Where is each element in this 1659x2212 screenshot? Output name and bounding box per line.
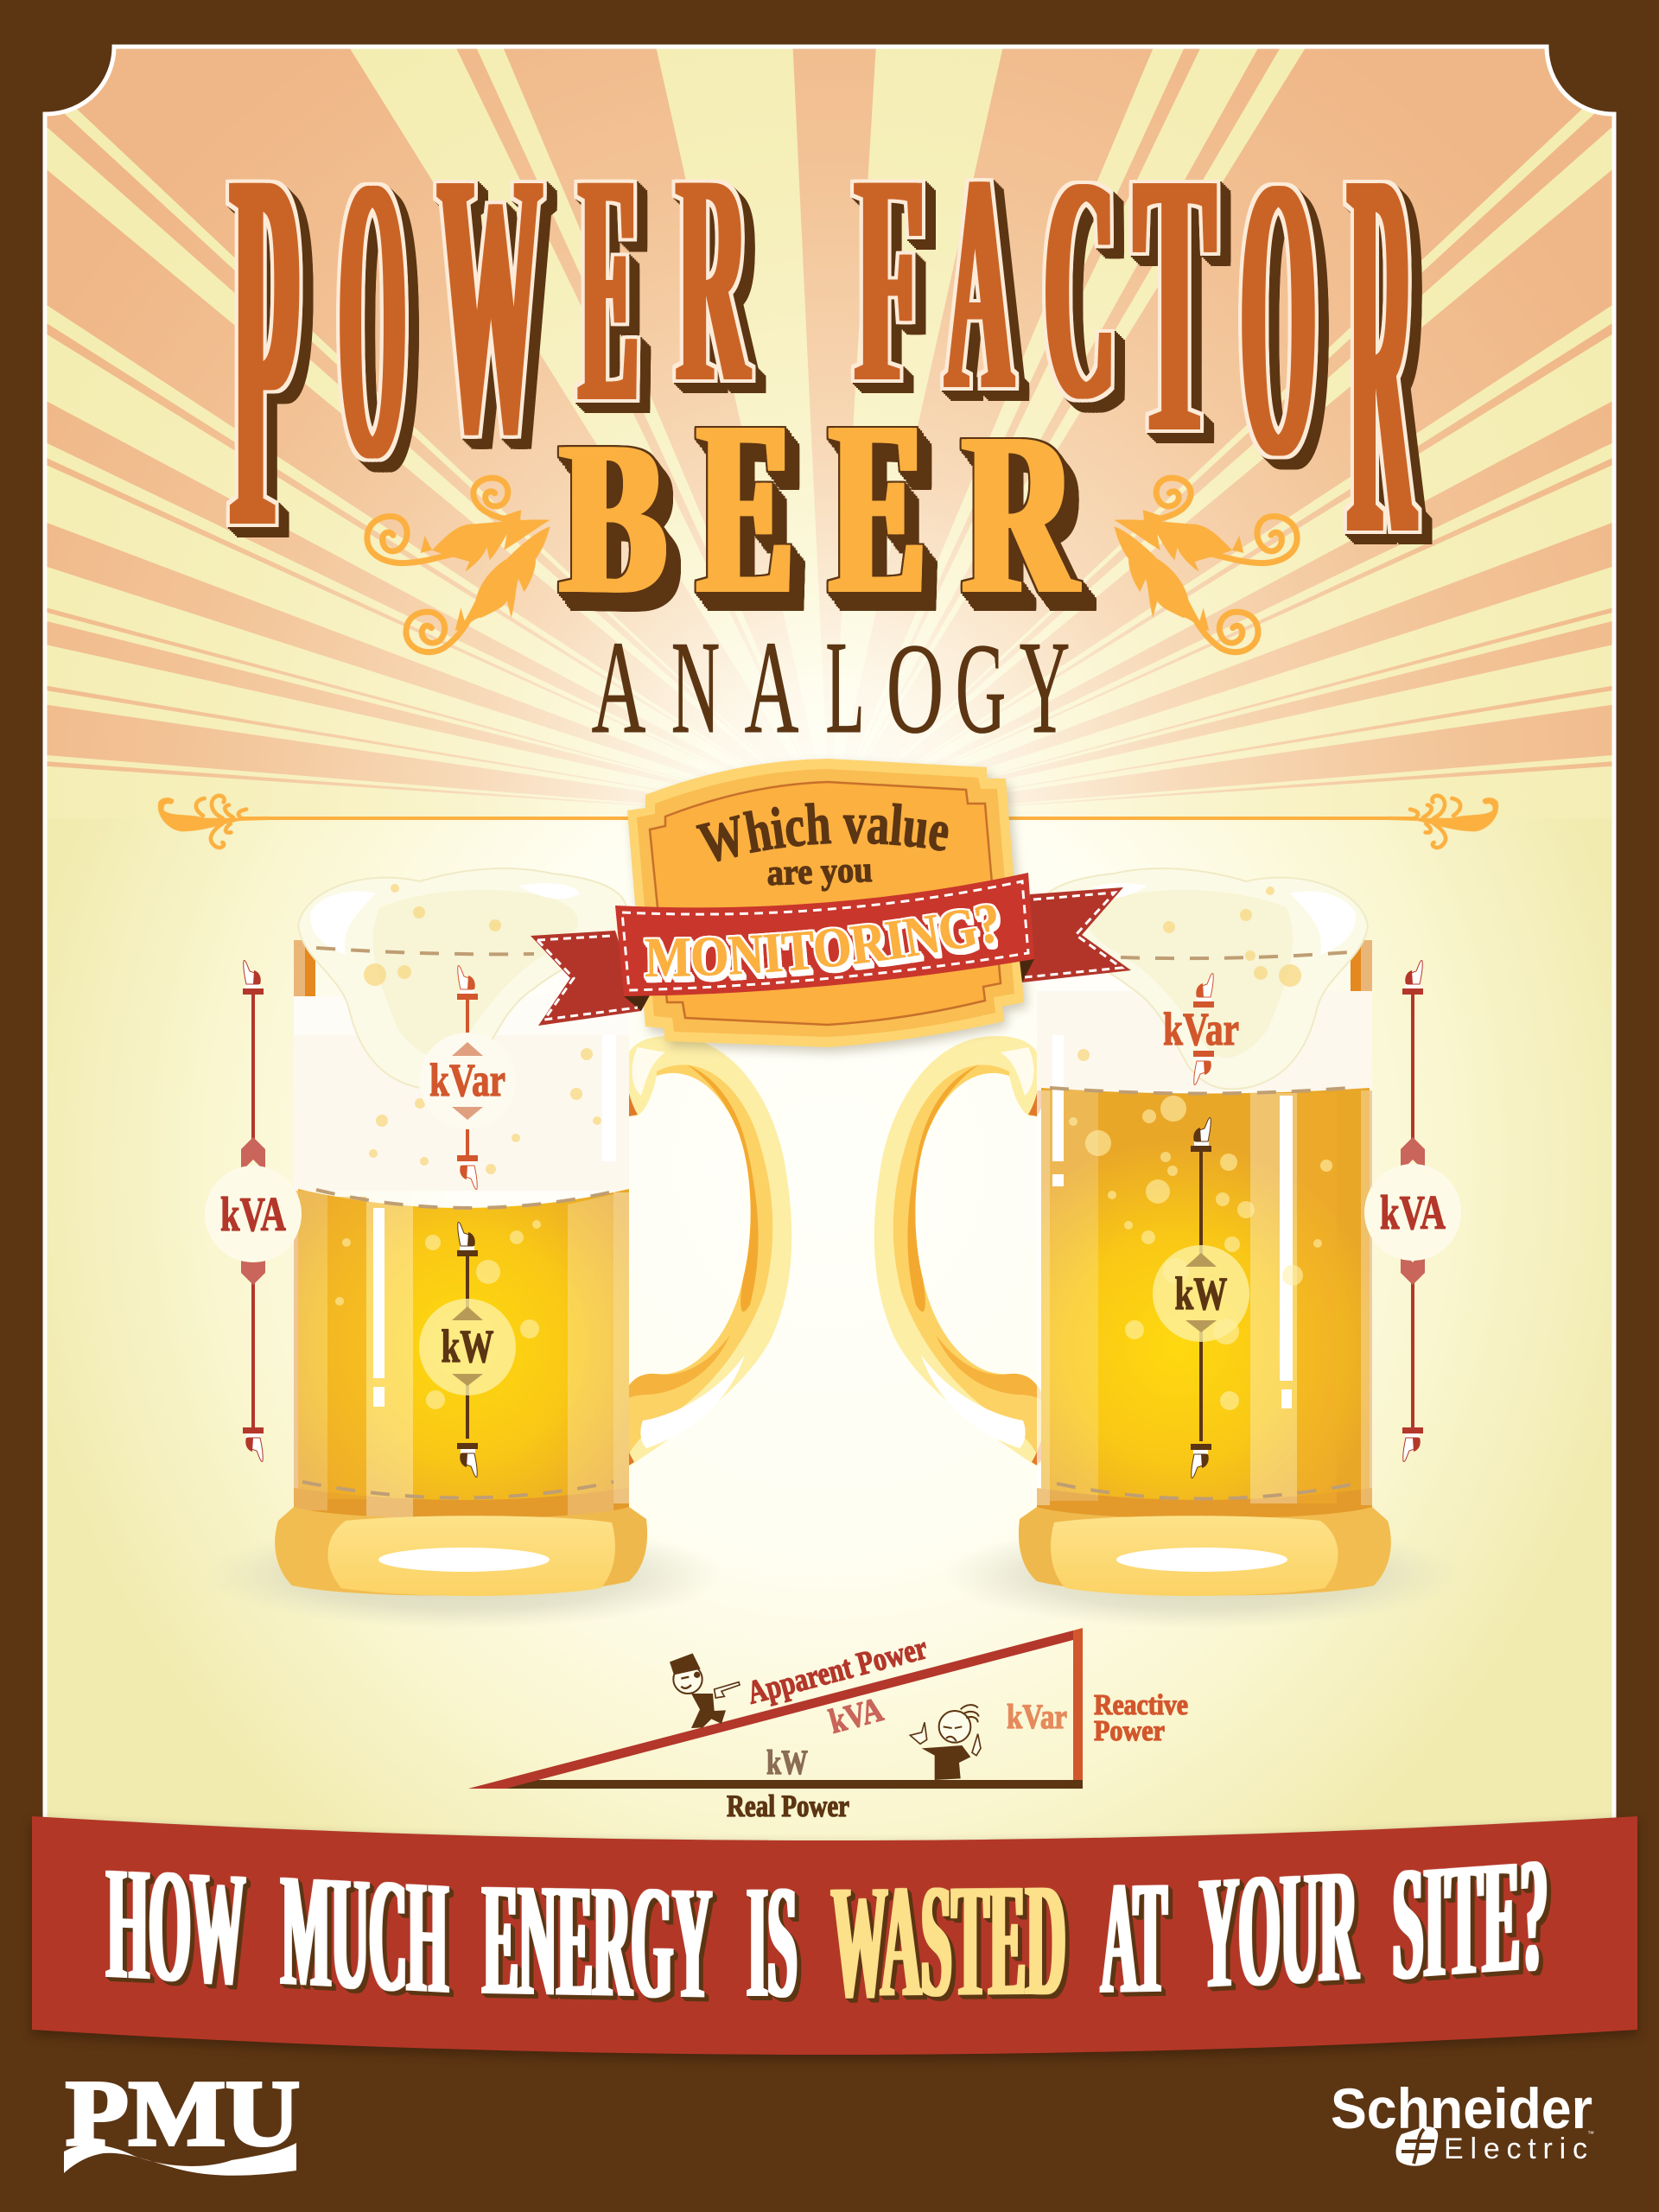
character: walking man bbox=[670, 1653, 740, 1728]
handle bbox=[615, 1036, 791, 1465]
title: POWER FACTOR: R bbox=[1348, 60, 1414, 646]
foam head bbox=[298, 868, 626, 1089]
title: POWER FACTOR: C bbox=[1045, 111, 1114, 466]
logo: PMU: PMU bbox=[66, 2063, 300, 2165]
foam head bbox=[1039, 868, 1368, 1089]
measure: right kVar bbox=[1163, 973, 1239, 1085]
logo: Schneider Electric: ™ bbox=[1587, 2130, 1594, 2138]
subtitle: ANALOGY: N bbox=[671, 614, 720, 761]
ornament: left flourish bbox=[367, 478, 550, 652]
subtitle: ANALOGY: A bbox=[745, 615, 798, 761]
title: POWER FACTOR: E bbox=[580, 106, 637, 471]
ribbon tails bbox=[531, 931, 641, 1026]
subtitle: ANALOGY: Y bbox=[1020, 613, 1070, 761]
label: kVA: kVA bbox=[825, 1689, 887, 1741]
measure: right kW bbox=[1153, 1117, 1249, 1478]
subtitle: BEER: B bbox=[562, 396, 665, 638]
subtitle: ANALOGY bbox=[592, 613, 1070, 761]
title: POWER FACTOR: O bbox=[1241, 95, 1315, 540]
logo: Schneider Electric: Electric bbox=[1444, 2133, 1587, 2165]
label: kVar: kVar bbox=[1007, 1697, 1067, 1736]
divider line with fleurons bbox=[158, 796, 1498, 848]
measure: left kW: kW bbox=[441, 1320, 494, 1372]
beer bbox=[1041, 1088, 1370, 1521]
ribbon text bbox=[645, 938, 1009, 976]
title: POWER FACTOR: W bbox=[439, 94, 540, 511]
measure: right kVA bbox=[1364, 960, 1461, 1462]
subtitle: BEER bbox=[562, 370, 1077, 645]
measure: left kVar bbox=[419, 965, 516, 1190]
label: Reactive Power: Reactive bbox=[1094, 1689, 1188, 1721]
banner headline: AT bbox=[1102, 1847, 1167, 2028]
logo: Schneider Electric bbox=[1331, 2076, 1594, 2166]
handle bbox=[874, 1036, 1051, 1465]
measure: right kVar: kVar bbox=[1163, 1003, 1239, 1055]
bubbles bbox=[364, 884, 601, 1174]
label: Reactive Power: Power bbox=[1094, 1715, 1165, 1747]
banner headline: YOUR bbox=[1200, 1834, 1359, 2023]
title: POWER FACTOR: F bbox=[855, 112, 923, 445]
banner headline: WASTED bbox=[832, 1849, 1066, 2031]
badge: which value are you monitoring: MONITORING? bbox=[644, 891, 1006, 989]
ribbon band bbox=[615, 873, 1034, 996]
label: Reactive Power bbox=[1094, 1689, 1188, 1747]
dashed level lines bbox=[1050, 952, 1357, 1498]
dashed level lines bbox=[302, 948, 613, 1498]
badge plaque bbox=[627, 759, 1024, 1047]
base bbox=[1019, 1507, 1391, 1596]
apparent power side bbox=[468, 1630, 1073, 1789]
banner headline: IS bbox=[747, 1852, 798, 2031]
badge heading bbox=[705, 842, 946, 864]
badge: which value are you monitoring: Which value bbox=[696, 803, 949, 862]
banner headline: SITE? bbox=[1393, 1823, 1548, 2014]
banner headline: HOW bbox=[107, 1833, 245, 2018]
right mug bbox=[874, 868, 1461, 1629]
subtitle: ANALOGY: A bbox=[592, 615, 645, 761]
subtitle: BEER: R bbox=[964, 385, 1077, 641]
badge: which value are you monitoring bbox=[531, 759, 1131, 1047]
badge subheading: are you bbox=[766, 850, 873, 893]
glass body bbox=[294, 940, 629, 1502]
subtitle: ANALOGY: O bbox=[887, 616, 944, 760]
base bbox=[275, 1507, 647, 1595]
mug shadow bbox=[205, 1522, 723, 1629]
subtitle: BEER: E bbox=[699, 370, 792, 645]
subtitle: ANALOGY: G bbox=[956, 618, 1006, 761]
measure: right kW: kW bbox=[1175, 1268, 1227, 1319]
banner headline: ENERGY bbox=[483, 1849, 712, 2033]
measure: right kVA: kVA bbox=[1380, 1186, 1446, 1240]
title: POWER FACTOR: R bbox=[677, 111, 748, 444]
glass body bbox=[1037, 940, 1372, 1502]
title: POWER FACTOR: P bbox=[231, 61, 298, 637]
subtitle: BEER: E bbox=[831, 370, 925, 645]
banner headline: MUCH bbox=[282, 1840, 448, 2028]
left mug bbox=[205, 868, 791, 1629]
mug shadow bbox=[943, 1522, 1461, 1629]
character: thinking man bbox=[910, 1705, 981, 1780]
bubbles bbox=[1077, 887, 1301, 1061]
real power side bbox=[505, 1780, 1083, 1789]
label: kW: kW bbox=[766, 1743, 808, 1782]
title: POWER FACTOR bbox=[231, 60, 1414, 646]
panel: bottom banner bbox=[32, 1816, 1637, 2055]
title: POWER FACTOR: T bbox=[1135, 94, 1214, 511]
banner headline bbox=[107, 1823, 1548, 2033]
power triangle diagram bbox=[468, 1628, 1188, 1823]
title: POWER FACTOR: A bbox=[946, 111, 1012, 455]
measure: left kVA: kVA bbox=[220, 1188, 286, 1242]
label: Apparent Power: Apparent Power bbox=[744, 1630, 931, 1712]
title: POWER FACTOR: O bbox=[339, 93, 405, 543]
ornament: right flourish bbox=[1114, 478, 1297, 652]
subtitle: ANALOGY: L bbox=[825, 614, 865, 761]
measure: left kVar: kVar bbox=[429, 1054, 505, 1106]
measure: left kVA bbox=[205, 960, 302, 1462]
label: Real Power: Real Power bbox=[727, 1789, 849, 1823]
logo: Schneider Electric: Schneider bbox=[1331, 2076, 1592, 2140]
measure: left kW bbox=[419, 1222, 516, 1478]
beer bbox=[298, 1189, 629, 1521]
reactive power side bbox=[1073, 1628, 1083, 1780]
